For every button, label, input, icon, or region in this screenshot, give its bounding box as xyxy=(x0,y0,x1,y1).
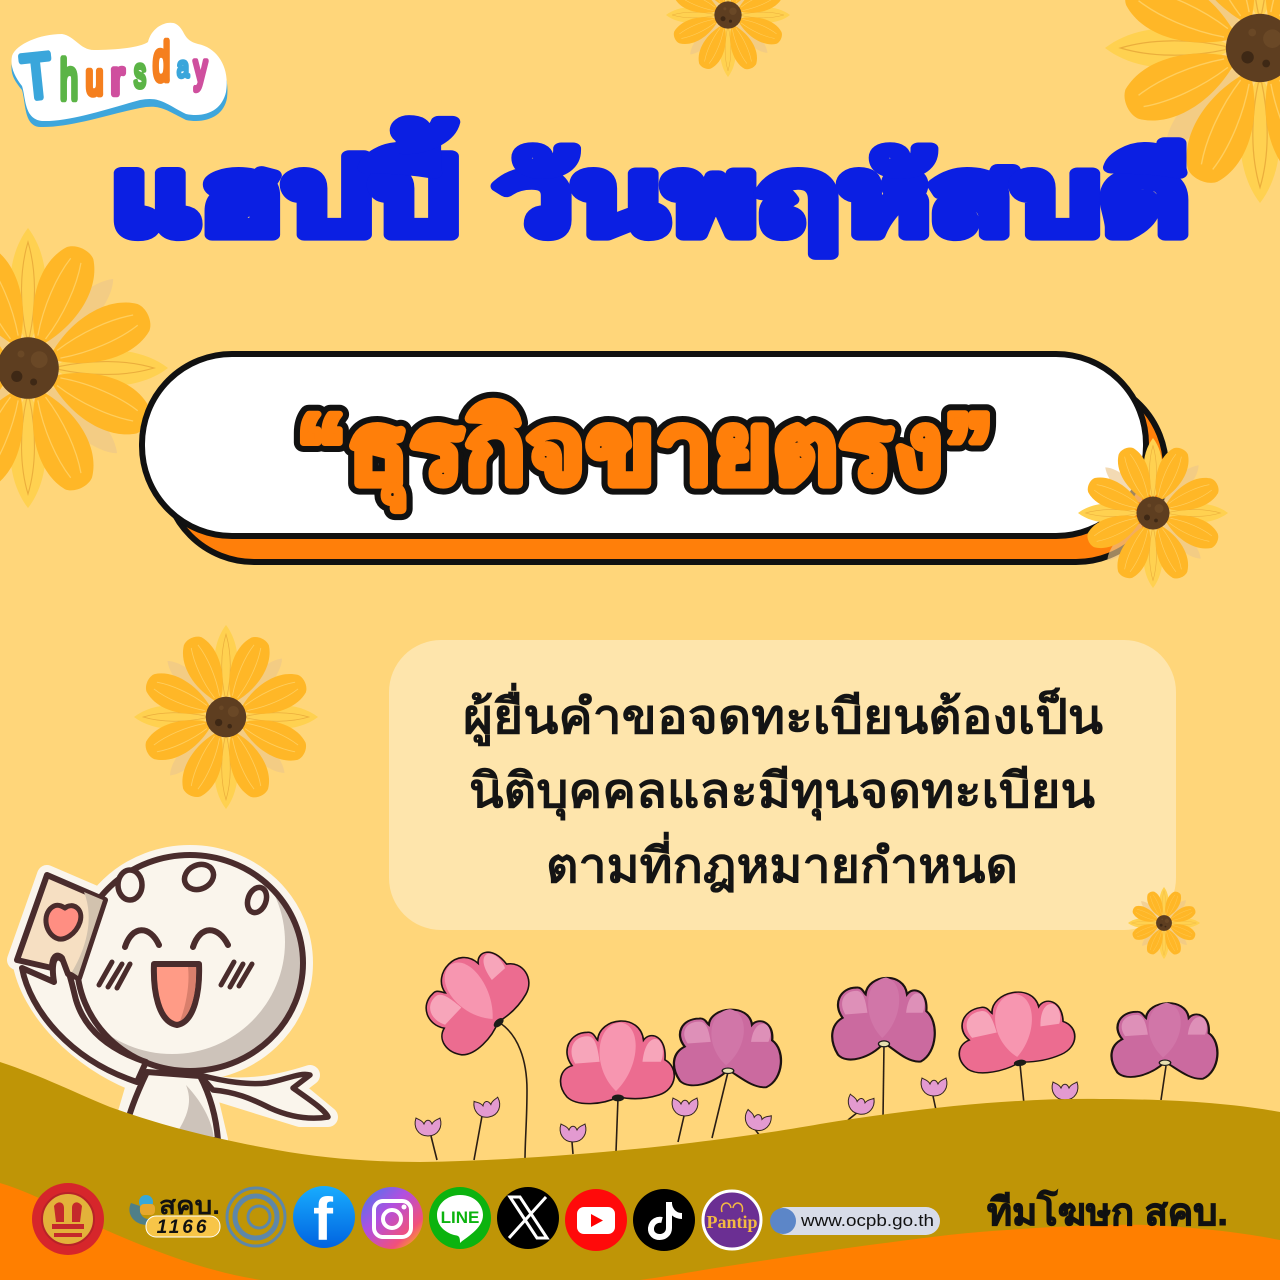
sunflower: pill right xyxy=(1078,438,1228,588)
team credit: ทีมโฆษก สคบ. xyxy=(987,1189,1228,1234)
website pill xyxy=(770,1207,940,1235)
icon: X xyxy=(497,1187,559,1249)
description text: ผู้ยื่นคำขอจดทะเบียนต้องเป็น xyxy=(463,682,1103,747)
logo: Thursday badge: d xyxy=(153,32,170,92)
footer logos xyxy=(32,1183,940,1255)
logo: Thursday badge: h xyxy=(60,48,78,111)
panel: topic pill xyxy=(142,354,1166,562)
sunflower: top right xyxy=(1105,0,1280,203)
orange ground wave xyxy=(0,1183,1280,1280)
icon: Facebook: f xyxy=(313,1186,334,1253)
mascot mouth xyxy=(154,964,199,1025)
icon: LINE xyxy=(429,1187,491,1249)
sunflower: middle left xyxy=(134,625,318,809)
panel: description xyxy=(389,640,1176,930)
mascot curls xyxy=(118,860,270,915)
sunflower: small right xyxy=(1128,887,1200,959)
topic heading: “ธุรกิจขายตรง” xyxy=(296,393,994,511)
description text: ตามที่กฎหมายกำหนด xyxy=(546,831,1018,893)
icon: Pantip xyxy=(703,1191,761,1249)
logo: OCPB ring xyxy=(227,1188,285,1246)
mascot character xyxy=(17,830,328,1140)
website pill: www.ocpb.go.th xyxy=(800,1211,934,1230)
mascot heart xyxy=(46,905,81,939)
mascot cheeks xyxy=(99,962,252,988)
logo: Thursday badge: u xyxy=(86,55,103,104)
sunflower: left xyxy=(0,228,168,508)
mascot card xyxy=(17,875,105,978)
icon: YouTube xyxy=(565,1189,627,1251)
logo: Thursday badge xyxy=(11,23,227,127)
sunflower: top centre xyxy=(666,0,790,77)
icon: TikTok xyxy=(633,1189,695,1251)
logo: Thursday badge: r xyxy=(111,52,124,104)
logo: hotline 1166: 1166 xyxy=(157,1217,209,1238)
mascot halo xyxy=(17,855,328,1140)
icon: Facebook xyxy=(293,1186,355,1253)
pill face xyxy=(142,354,1146,536)
pill shadow xyxy=(164,378,1166,562)
mascot eyes xyxy=(125,930,228,947)
logo: Thursday badge: y xyxy=(194,47,207,91)
topic heading: “ธุรกิจขายตรง” xyxy=(296,393,994,511)
mascot arm right xyxy=(200,1074,328,1118)
description text xyxy=(463,682,1103,893)
icon: Pantip: Pantip xyxy=(706,1212,758,1232)
logo: seal xyxy=(32,1183,104,1255)
icon: Instagram xyxy=(361,1187,423,1249)
logo: Thursday badge: a xyxy=(177,51,189,84)
logo: Thursday badge: s xyxy=(134,49,146,96)
logo: hotline 1166 xyxy=(129,1192,220,1238)
mascot body xyxy=(123,1072,218,1140)
title: แฮปปี้ วันพฤหัสบดี xyxy=(111,121,1189,256)
description text: นิติบุคคลและมีทุนจดทะเบียน xyxy=(469,765,1095,821)
mascot head xyxy=(75,852,306,1074)
logo: hotline 1166: สคบ. xyxy=(159,1192,220,1220)
icon: LINE: LINE xyxy=(441,1208,479,1227)
ochre ground wave xyxy=(0,1062,1280,1280)
mascot arm left xyxy=(22,958,146,1082)
logo: Thursday badge: T xyxy=(18,41,55,113)
flowers meadow xyxy=(406,929,1217,1160)
